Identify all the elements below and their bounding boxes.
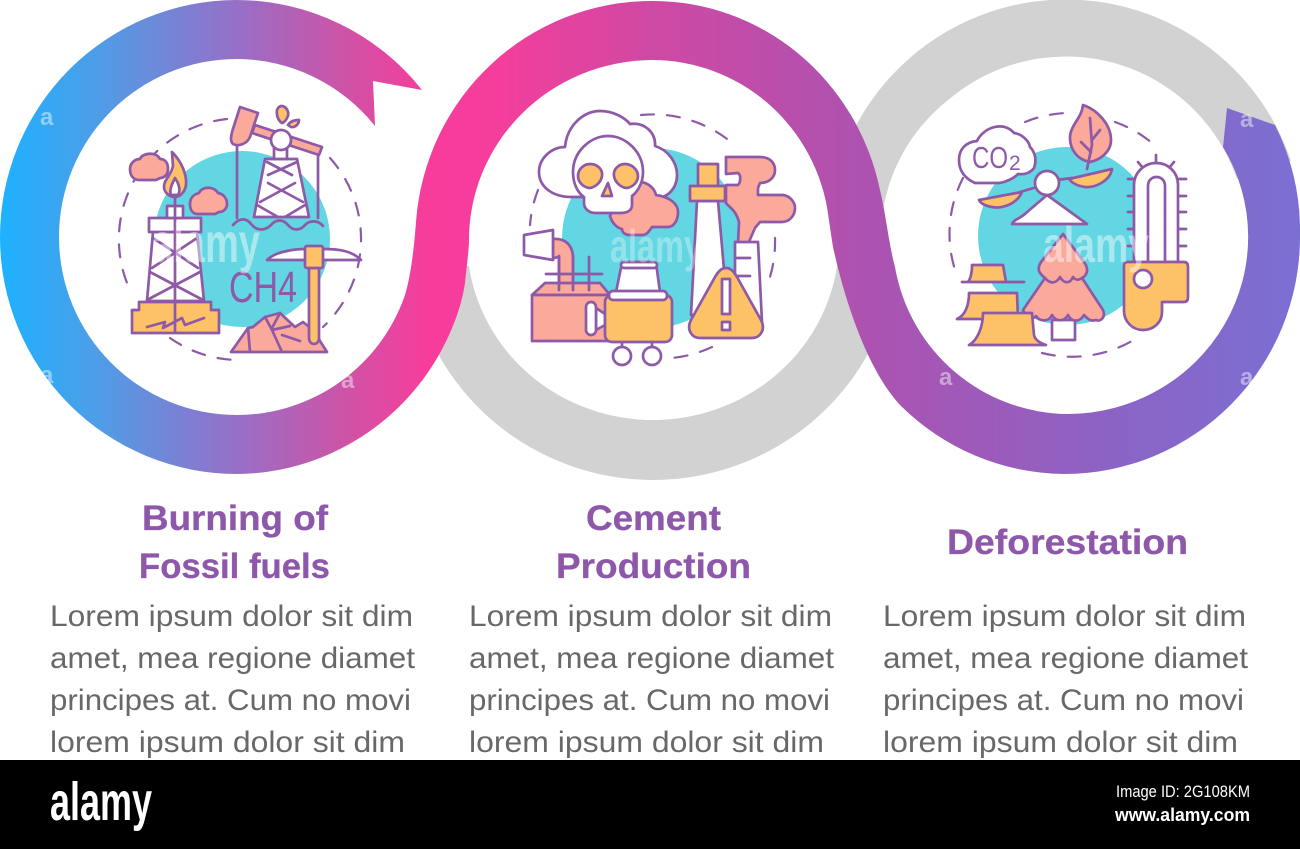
body text: column 1: amet, mea regione diamet xyxy=(50,642,416,675)
stumps xyxy=(957,265,1046,345)
gradient ribbon arrow xyxy=(0,0,1300,474)
chimney xyxy=(690,164,728,315)
heading: burning of fossil fuels: Fossil fuels xyxy=(139,547,330,586)
dashed ring xyxy=(950,113,1152,357)
heading: deforestation: Deforestation xyxy=(947,523,1188,562)
teal backdrop xyxy=(978,147,1156,325)
watermarks: a xyxy=(341,367,355,394)
peach machine xyxy=(532,256,610,341)
body text: column 3 xyxy=(883,600,1249,759)
skull xyxy=(573,136,643,213)
heading: cement production: Cement xyxy=(586,499,721,538)
teal backdrop xyxy=(562,148,742,328)
oil rig with flame xyxy=(132,152,219,333)
watermarks: a xyxy=(939,364,953,391)
yellow mixer xyxy=(605,262,672,365)
dashed ring xyxy=(119,119,361,360)
coal pile xyxy=(231,313,327,352)
body text: column 3: lorem ipsum dolor sit dim xyxy=(883,726,1238,759)
watermarks: a xyxy=(1240,364,1254,391)
image id: Image ID: 2G108KM xyxy=(1116,782,1250,801)
methane label: CH4 xyxy=(229,263,297,312)
white disc: left xyxy=(59,59,415,415)
watermarks: alamy xyxy=(152,211,260,274)
heading: burning of fossil fuels xyxy=(139,499,330,586)
heading: cement production: Production xyxy=(556,547,751,586)
toxic cloud xyxy=(539,111,677,197)
pump jack xyxy=(231,106,323,230)
CO2 cloud: 2 xyxy=(1009,152,1021,175)
footer logo: alamy xyxy=(50,772,152,832)
pickaxe xyxy=(267,246,361,344)
teal backdrop xyxy=(154,151,330,327)
balance scale xyxy=(979,169,1112,224)
body text: column 2 xyxy=(469,600,835,759)
body text: column 1 xyxy=(50,600,416,759)
grey ring: middle lower arc xyxy=(441,270,865,450)
heading: burning of fossil fuels: Burning of xyxy=(142,499,328,538)
CO2 cloud: CO xyxy=(972,140,1008,175)
body text: column 1: lorem ipsum dolor sit dim xyxy=(50,726,405,759)
dashed ring xyxy=(530,114,775,358)
grey ring: right upper arc xyxy=(857,28,1264,230)
icon: deforestation xyxy=(950,105,1188,357)
smoke xyxy=(726,157,795,244)
funnel and pipe xyxy=(524,230,573,285)
white disc: middle xyxy=(467,60,839,420)
watermarks: a xyxy=(40,104,54,131)
clouds xyxy=(130,154,227,214)
body text: column 3: principes at. Cum no movi xyxy=(883,684,1244,717)
heading: cement production xyxy=(556,499,751,586)
chainsaw xyxy=(1124,155,1188,330)
peach cloud xyxy=(610,182,678,235)
watermarks: a xyxy=(40,362,54,389)
watermarks: alamy xyxy=(1043,217,1149,273)
body text: column 2: amet, mea regione diamet xyxy=(469,642,835,675)
body text: column 2: principes at. Cum no movi xyxy=(469,684,830,717)
white disc: right xyxy=(881,60,1247,414)
watermarks: alamy xyxy=(610,220,702,272)
body text: column 2: Lorem ipsum dolor sit dim xyxy=(469,600,832,633)
CO2 cloud xyxy=(959,126,1035,183)
body text: column 1: Lorem ipsum dolor sit dim xyxy=(50,600,413,633)
body text: column 2: lorem ipsum dolor sit dim xyxy=(469,726,824,759)
footer bar xyxy=(0,760,1300,849)
body text: column 3: Lorem ipsum dolor sit dim xyxy=(883,600,1246,633)
watermarks: a xyxy=(1240,106,1254,133)
body text: column 3: amet, mea regione diamet xyxy=(883,642,1249,675)
watermarks xyxy=(40,104,1254,394)
leaf xyxy=(1070,105,1111,169)
tube xyxy=(735,242,762,322)
tree xyxy=(1023,234,1104,340)
body text: column 1: principes at. Cum no movi xyxy=(50,684,411,717)
icon: cement production xyxy=(524,111,795,365)
warning triangle xyxy=(689,268,763,338)
website: www.alamy.com xyxy=(1114,805,1250,825)
icon: fossil fuels xyxy=(119,106,361,360)
